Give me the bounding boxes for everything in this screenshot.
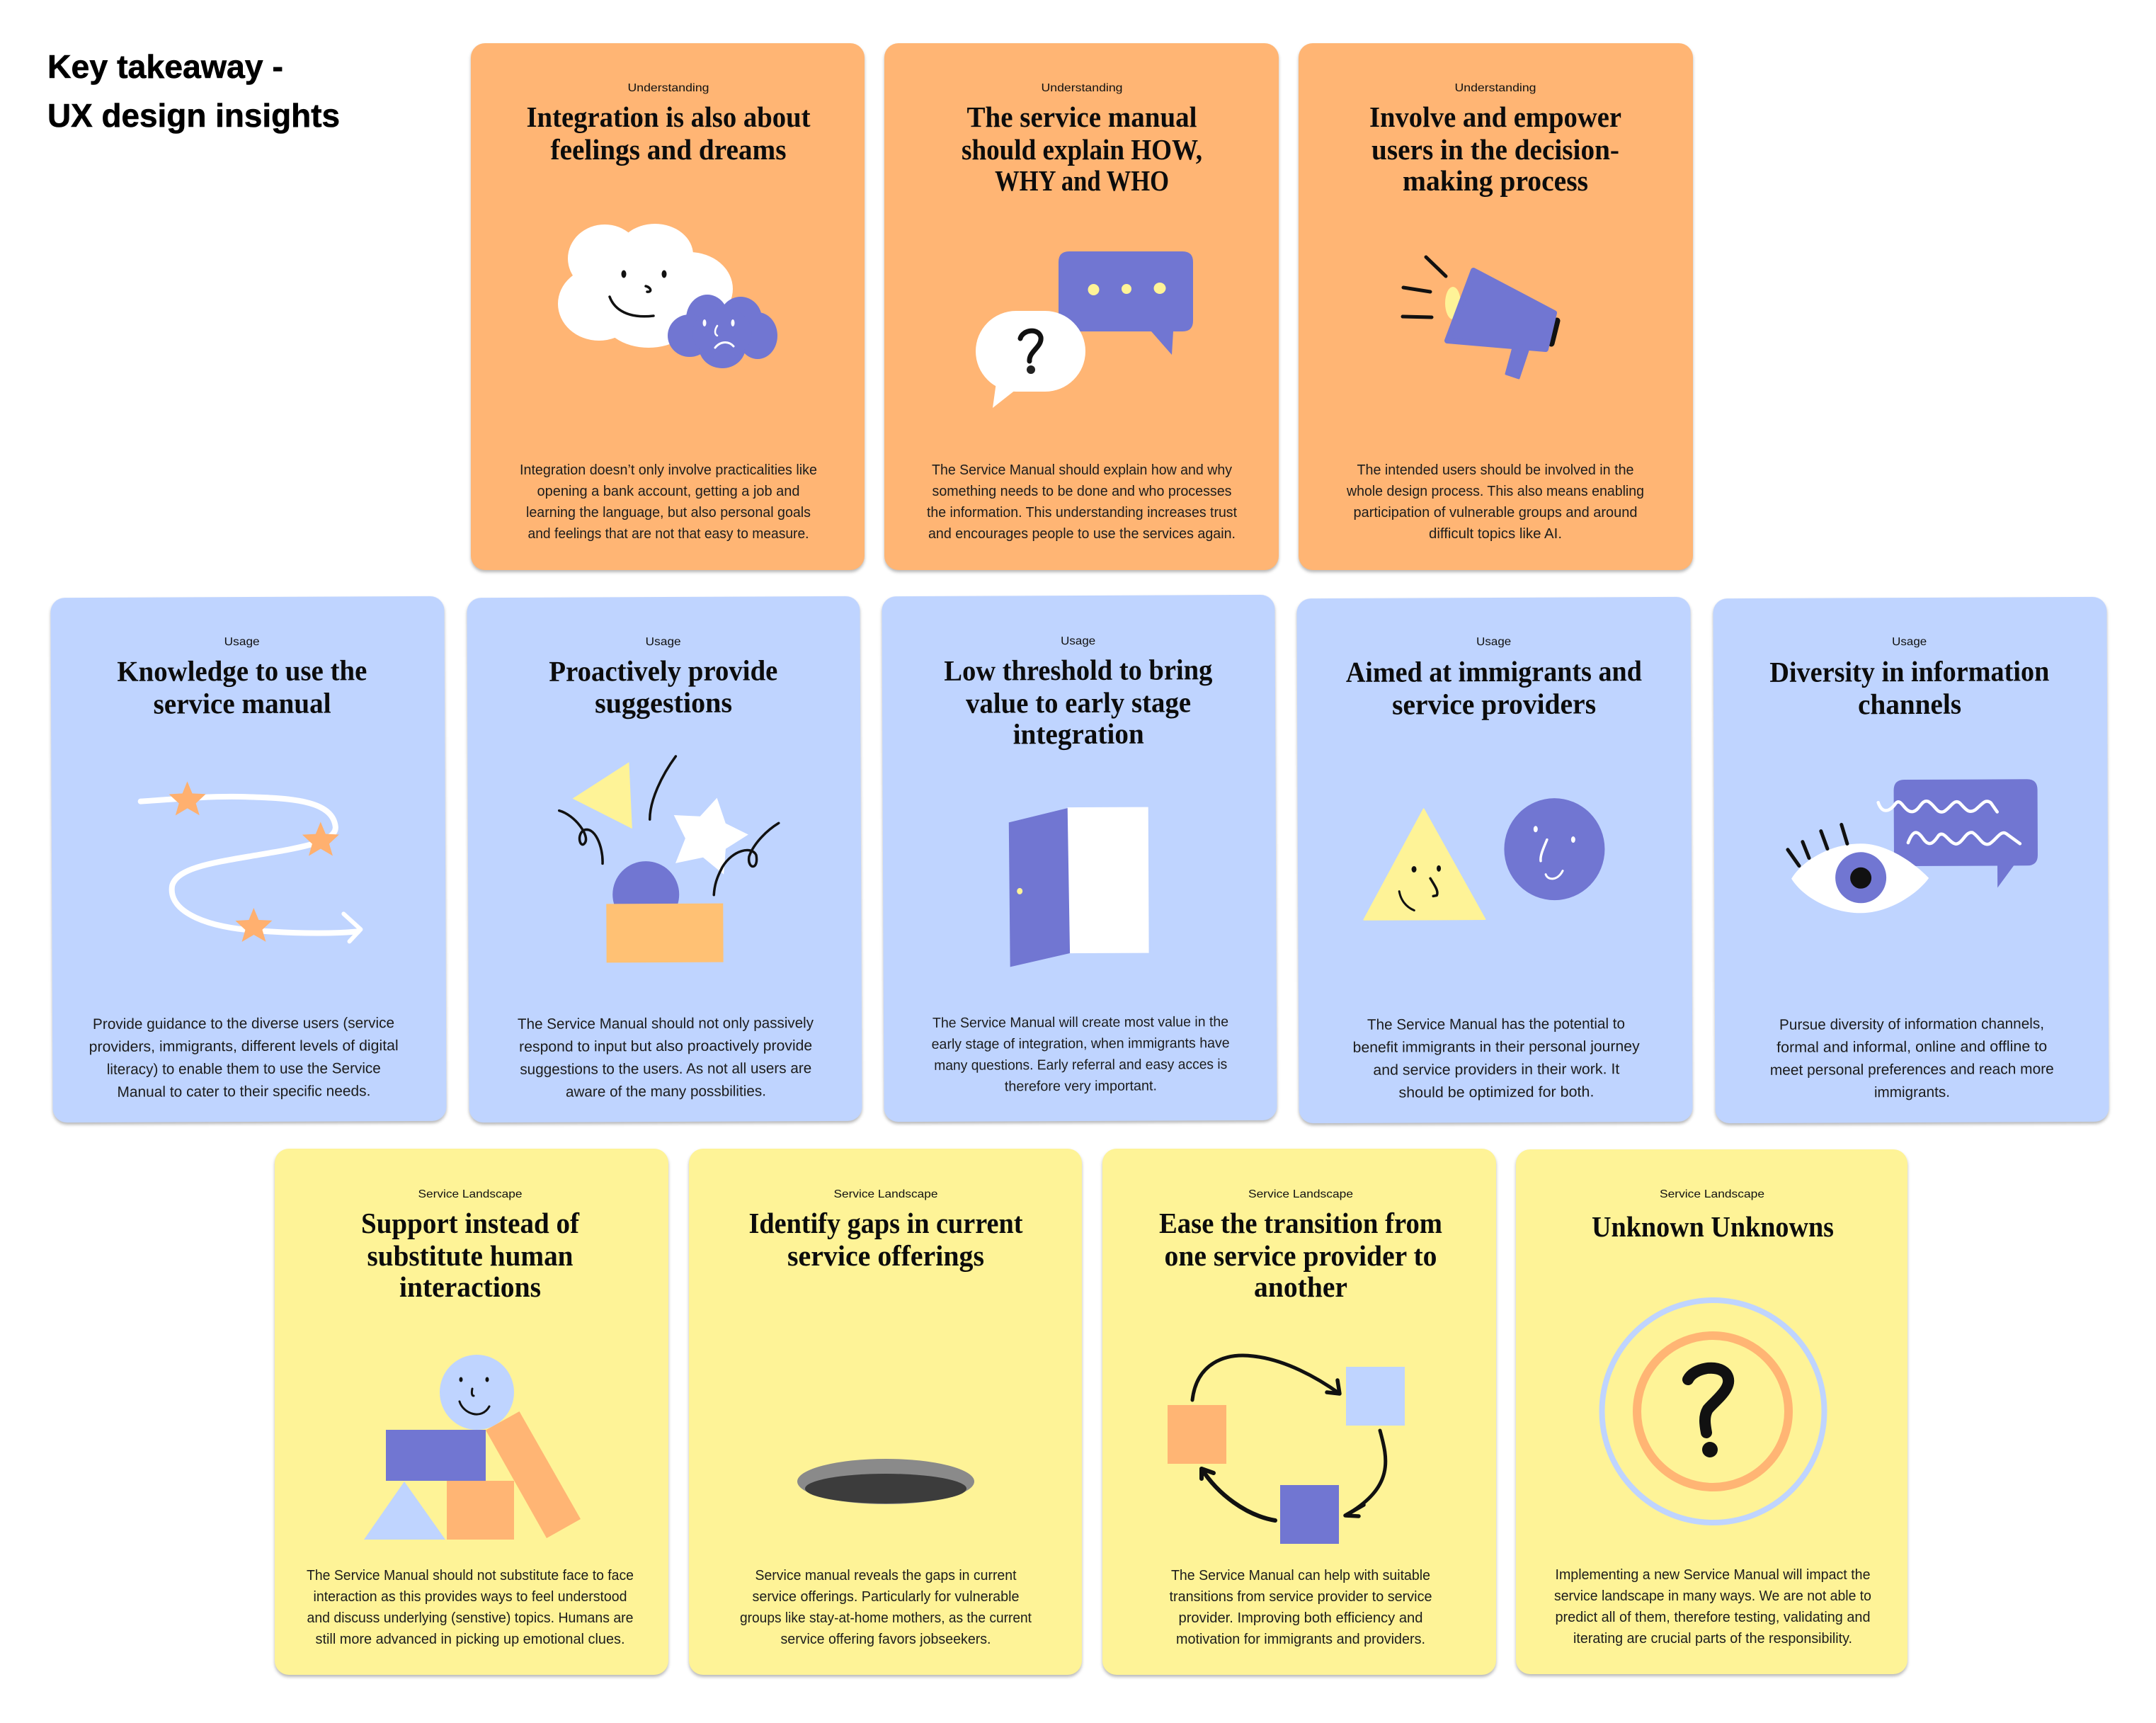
body text: early stage of integration, when immigrants have [932,1035,1230,1052]
body text: The intended users should be involved in the [1357,462,1634,478]
body text: The Service Manual can help with suitable [1171,1568,1430,1583]
category label: Service Landscape [1248,1188,1353,1200]
body text: iterating are crucial parts of the responsibility. [1573,1631,1852,1647]
panel: Proactively provide suggestions [467,596,862,1122]
icon: eye and speech bubble [1788,779,2038,914]
heading: channels [1858,688,1961,720]
body text: providers, immigrants, different levels of digital [89,1037,399,1055]
heading: WHY and WHO [995,164,1169,197]
body text [518,1015,814,1101]
body text: service offerings. Particularly for vulnerable [752,1589,1020,1605]
body text: Provide guidance to the diverse users (service [93,1015,394,1033]
body text [927,462,1237,542]
heading: substitute human [367,1239,574,1272]
heading: service manual [153,686,331,720]
body text: benefit immigrants in their personal journey [1353,1038,1640,1056]
body text: respond to input but also proactively provide [519,1037,812,1055]
body text: suggestions to the users. As not all users are [520,1060,811,1078]
icon: question mark in rings [1602,1300,1824,1523]
category label: Service Landscape [418,1188,523,1200]
body text: aware of the many possbilities. [566,1083,766,1101]
heading: service providers [1392,687,1596,721]
category label: Understanding [627,82,709,94]
heading: Integration is also about [527,101,811,133]
heading [361,1207,580,1303]
icon: megaphone [1403,257,1557,378]
body text: meet personal preferences and reach more [1770,1061,2054,1079]
body text [1170,1568,1432,1647]
body text [520,462,817,542]
body text: Service manual reveals the gaps in current [755,1568,1017,1583]
body text: and encourages people to use the services again. [928,526,1236,542]
body text: Implementing a new Service Manual will impact the [1555,1567,1871,1583]
body text: still more advanced in picking up emotional clues. [316,1632,624,1647]
body text [931,1014,1230,1095]
body text: immigrants. [1874,1084,1950,1101]
panel: Low threshold to bring value to early stage integration [882,595,1277,1122]
body text [1346,462,1644,542]
heading [1369,101,1621,197]
heading [1769,654,2050,721]
category label: Usage [646,636,681,648]
body text: transitions from service provider to service [1170,1589,1432,1605]
heading: Involve and empower [1369,101,1621,133]
category label: Understanding [1041,82,1123,94]
heading [1346,654,1642,721]
body text [740,1568,1032,1647]
panel: Ease the transition from one service provider to another [1102,1149,1496,1675]
category label: Usage [1476,636,1511,648]
heading: another [1254,1270,1347,1303]
heading: Diversity in information [1769,654,2050,688]
heading [944,653,1213,751]
heading: service offerings [787,1239,984,1272]
heading: Identify gaps in current [749,1207,1023,1239]
body text: formal and informal, online and offline to [1776,1038,2047,1056]
body text: difficult topics like AI. [1429,526,1562,542]
heading: one service provider to [1164,1239,1437,1272]
heading: interactions [399,1270,541,1303]
category label: Usage [224,636,260,648]
body text: The Service Manual should not substitute face to face [307,1568,634,1583]
panel: Identify gaps in current service offerings [689,1149,1082,1675]
body text: should be optimized for both. [1398,1084,1594,1101]
heading: Low threshold to bring [944,653,1213,687]
heading: The service manual [967,101,1197,133]
body text: and discuss underlying (senstive) topics. Humans are [307,1610,633,1626]
heading [527,101,811,166]
body text: literacy) to enable them to use the Service [107,1060,381,1078]
body text: learning the language, but also personal goals [526,505,811,521]
heading: Unknown Unknowns [1592,1210,1834,1243]
body text: Integration doesn’t only involve practicalities like [520,462,817,478]
panel: Diversity in information channels [1713,597,2109,1123]
body text: the information. This understanding increases trust [927,505,1237,521]
title: UX design insights [47,97,340,134]
heading: should explain HOW, [962,133,1202,166]
heading [962,101,1202,197]
panel: Knowledge to use the service manual [50,596,447,1122]
body text [89,1015,399,1101]
icon: box with shapes [559,756,780,963]
icon: open door [1009,807,1149,967]
body text: The Service Manual should explain how and why [932,462,1232,478]
body text: and service providers in their work. It [1373,1061,1620,1079]
heading: Support instead of [361,1207,580,1239]
body text: The Service Manual should not only passively [518,1015,814,1033]
body text: many questions. Early referral and easy acces is [934,1057,1227,1074]
body text: motivation for immigrants and providers. [1176,1632,1425,1647]
body text: groups like stay-at-home mothers, as the current [740,1610,1032,1626]
category label: Usage [1061,635,1095,647]
body text: interaction as this provides ways to feel understood [313,1589,627,1605]
body text: whole design process. This also means enabling [1346,484,1644,499]
heading: Knowledge to use the [117,654,367,688]
body text: Pursue diversity of information channels, [1779,1016,2044,1033]
icon: cycle of three blocks with arrows [1168,1355,1405,1544]
body text: service offering favors jobseekers. [780,1632,991,1647]
panel: Aimed at immigrants and service providers [1296,597,1693,1123]
heading: value to early stage [966,686,1191,720]
panel: Support instead of substitute human interactions [275,1149,668,1675]
category label: Usage [1892,636,1927,648]
heading: Aimed at immigrants and [1346,654,1642,688]
category label: Service Landscape [834,1188,938,1200]
body text: opening a bank account, getting a job and [537,484,800,499]
category label: Understanding [1454,82,1536,94]
heading: Proactively provide [549,654,777,688]
body text: The Service Manual has the potential to [1367,1016,1625,1033]
icon: winding path with stars [141,780,361,943]
body text [1554,1567,1871,1647]
panel: Unknown Unknowns [1516,1149,1907,1674]
heading: users in the decision- [1371,133,1619,166]
body text: participation of vulnerable groups and around [1354,505,1637,521]
heading: suggestions [595,686,732,719]
heading: feelings and dreams [551,133,786,166]
icon: hole in the ground [797,1459,974,1504]
category label: Service Landscape [1660,1188,1764,1200]
body text: service landscape in many ways. We are not able to [1554,1588,1871,1604]
heading: Ease the transition from [1159,1207,1442,1239]
panel: The service manual should explain HOW, WHY and WHO [884,43,1279,570]
body text: Manual to cater to their specific needs. [117,1083,370,1101]
icon: triangle and circle faces [1364,798,1605,920]
icon: stacked blocks with face [364,1355,581,1540]
icon: speech bubbles [976,251,1193,408]
heading: making process [1403,164,1588,197]
body text: therefore very important. [1005,1079,1157,1094]
heading [117,654,367,720]
body text: The Service Manual will create most value in the [932,1014,1228,1031]
body text: something needs to be done and who processes [932,484,1232,499]
body text: predict all of them, therefore testing, validating and [1555,1610,1871,1625]
title [47,48,340,134]
panel: Involve and empower users in the decision-making process [1299,43,1693,570]
heading [549,654,778,720]
heading: integration [1013,717,1144,750]
body text [307,1568,634,1647]
icon: happy and sad clouds [558,224,777,368]
body text [1352,1016,1640,1101]
heading [749,1207,1023,1272]
title: Key takeaway - [47,48,283,85]
heading [1159,1207,1442,1303]
panel: Integration is also about feelings and dreams [471,43,865,570]
body text [1769,1016,2054,1101]
body text: and feelings that are not that easy to measure. [528,526,809,542]
body text: provider. Improving both efficiency and [1178,1610,1423,1626]
